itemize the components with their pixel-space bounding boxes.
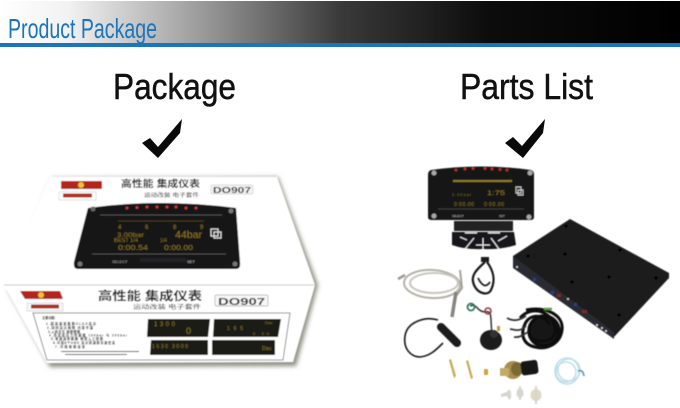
feature list: 7.可接收和设定 bbox=[55, 344, 86, 349]
feature list: 1.超高速采集和OLED显示 bbox=[46, 321, 97, 326]
feature list: 6.可接8个OBD 显示转速和车速信息 bbox=[53, 340, 116, 345]
model badge front: DO907 bbox=[218, 296, 265, 308]
front logos bbox=[20, 291, 63, 311]
front box title bbox=[98, 288, 202, 311]
model badge top bbox=[211, 185, 253, 195]
top box title bbox=[121, 178, 201, 199]
control box bbox=[513, 219, 669, 339]
wiring harness bbox=[507, 309, 562, 348]
box top face bbox=[4, 177, 315, 285]
top logos bbox=[59, 181, 102, 200]
oled screens bbox=[147, 319, 281, 355]
parts list items bbox=[398, 166, 669, 404]
small connector harness bbox=[473, 257, 494, 293]
heading: Package: Package bbox=[113, 66, 236, 107]
gauge display: SET bbox=[499, 214, 505, 218]
feature list bbox=[42, 315, 139, 354]
gauge display on box: 9 bbox=[200, 225, 204, 231]
wired sensor dial bbox=[468, 304, 502, 350]
feature list: 5.单通道传感器 附带人工智能 bbox=[51, 336, 104, 341]
oled screens: 1300 bbox=[154, 322, 176, 328]
gauge display: 0:00.00 bbox=[484, 202, 504, 208]
pressure sender bbox=[500, 360, 539, 379]
icon: check mark package bbox=[142, 119, 182, 158]
gauge display: 0:00.00 bbox=[454, 202, 474, 208]
top box title: 运动改装 电子套件 bbox=[144, 191, 200, 199]
gauge display: SELECT bbox=[452, 214, 464, 218]
heading: Product Package: Product Package bbox=[8, 13, 157, 44]
gauge display on box: SET bbox=[187, 259, 195, 264]
box front face bbox=[4, 285, 315, 363]
feature list: 主要功能: bbox=[42, 315, 56, 320]
gauge display on box: 44bar bbox=[175, 230, 203, 241]
gauge display on box: SELECT bbox=[112, 259, 128, 264]
clear tubing bbox=[555, 358, 584, 384]
top box title: 高性能 集成仪表 bbox=[121, 178, 201, 190]
model badge front bbox=[215, 295, 268, 308]
thermocouple cable bbox=[398, 269, 462, 317]
header banner bbox=[0, 1, 680, 47]
oled screens: Dau bbox=[262, 346, 271, 352]
feature list: 2.同时显示两项 内容丰富 bbox=[47, 325, 93, 330]
feature panel bbox=[33, 313, 290, 360]
oled screens: 1630 bbox=[152, 344, 168, 350]
gauge display on box: 0:00.00 bbox=[164, 245, 193, 252]
feature list: 3.人机交互 按键便捷 bbox=[48, 329, 81, 334]
gauge display: 3.00bar bbox=[452, 193, 472, 197]
model badge top: DO907 bbox=[213, 185, 251, 195]
gauge display on box: 1/4 bbox=[160, 238, 167, 244]
icon: check mark parts list bbox=[505, 119, 545, 158]
gauge display on box: 0:00.54 bbox=[118, 245, 148, 252]
gauge display on box: BEST 1/4 bbox=[114, 238, 138, 244]
gauge display: 1:75 bbox=[487, 191, 506, 197]
oled screens: Dau bbox=[265, 320, 272, 325]
gauge display on box: 6 bbox=[145, 225, 149, 231]
oled screens: 165 bbox=[227, 326, 243, 332]
gauge display on box: 8 bbox=[173, 225, 177, 231]
mounting bracket bbox=[452, 221, 516, 250]
front box title: 运动改装 电子套件 bbox=[133, 303, 201, 311]
heading: Parts List: Parts List bbox=[460, 66, 593, 107]
gauge display on box: 4 bbox=[118, 225, 122, 231]
oled screens: 0.00 bbox=[253, 331, 270, 336]
front box title: 高性能 集成仪表 bbox=[98, 288, 202, 303]
oled screens: 0 bbox=[186, 326, 191, 336]
brass sensors bbox=[449, 359, 488, 379]
gauge display on box bbox=[74, 203, 240, 269]
gauge display on box: 3.00bar bbox=[117, 233, 144, 239]
switch with cable bbox=[405, 319, 457, 357]
hose fittings bbox=[501, 386, 542, 404]
oled screens: 3000 bbox=[172, 344, 188, 350]
box shadow bbox=[8, 177, 318, 367]
product box bbox=[4, 177, 318, 367]
gauge display bbox=[428, 166, 534, 220]
feature list: 4.自适应压力传感器 100bar 与 200bar bbox=[49, 332, 128, 338]
